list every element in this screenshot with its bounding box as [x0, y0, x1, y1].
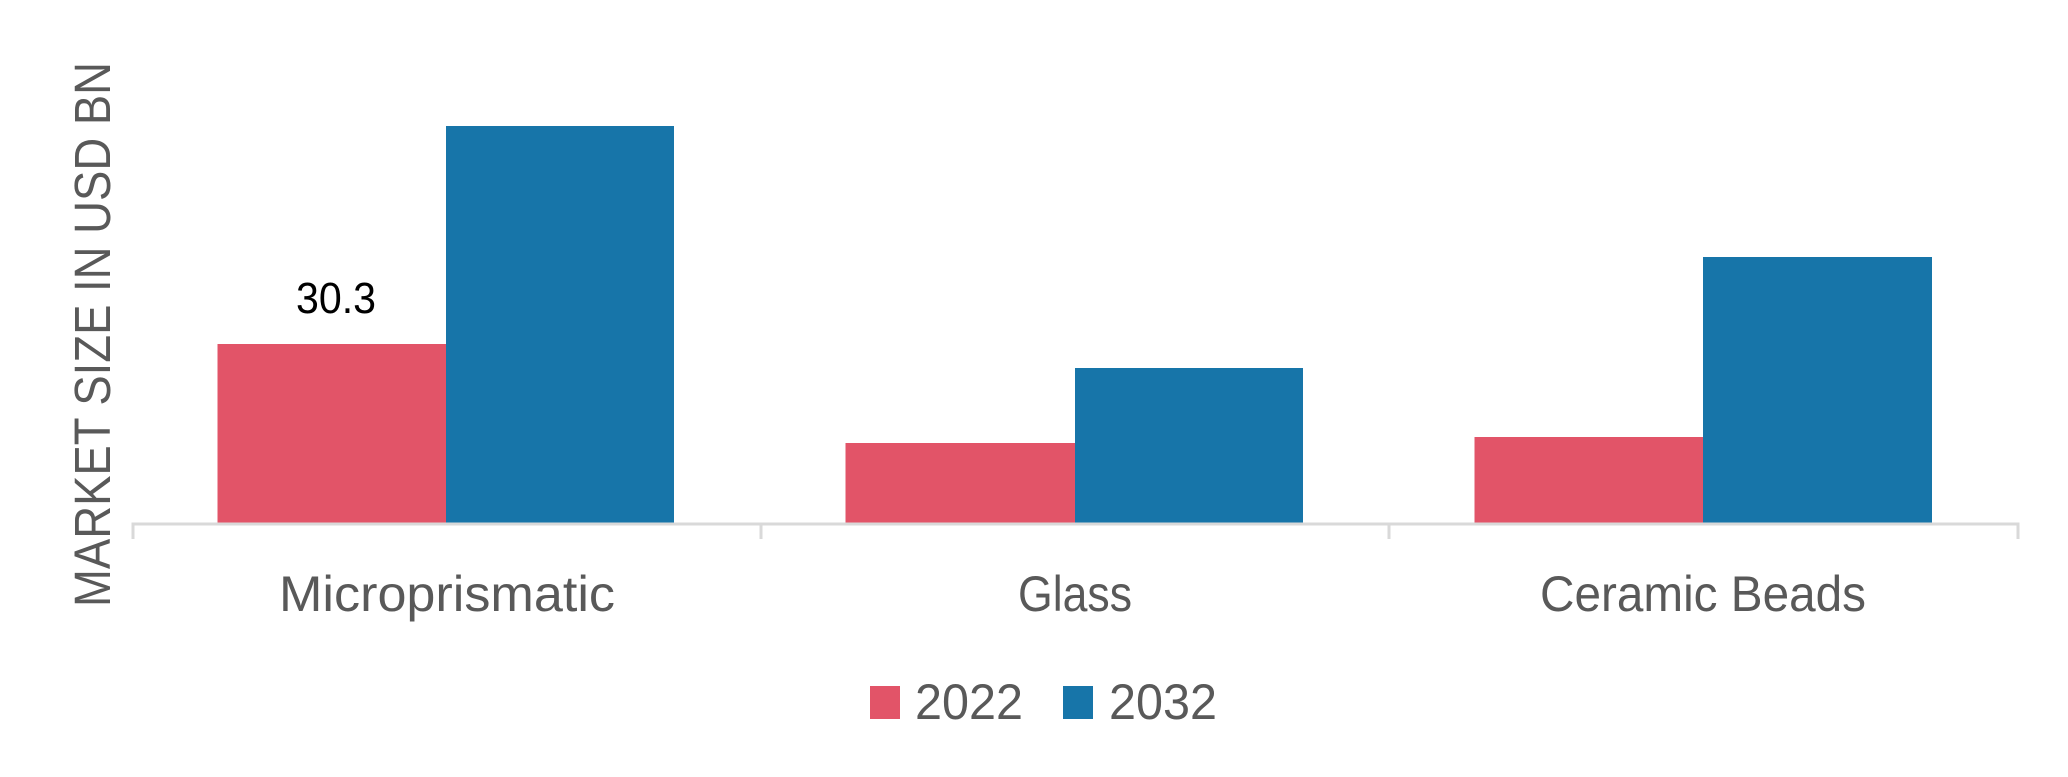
- x-axis line with ticks: [133, 524, 2018, 539]
- legend swatch: 2032: [1063, 686, 1093, 719]
- legend: [870, 674, 1217, 730]
- category label: Glass: Glass: [1018, 566, 1132, 622]
- category label: Ceramic Beads: Ceramic Beads: [1540, 566, 1866, 622]
- y-axis title: MARKET SIZE IN USD BN: [64, 62, 121, 607]
- legend label: 2022: 2022: [915, 674, 1023, 730]
- bar group: Glass: [846, 368, 1303, 524]
- bar group: Microprismatic: [218, 126, 674, 524]
- legend swatch: 2022: [870, 686, 900, 719]
- legend label: 2032: 2032: [1109, 674, 1217, 730]
- category label: Microprismatic: Microprismatic: [279, 566, 615, 622]
- data label: 30.3: 30.3: [296, 274, 376, 323]
- bar group: Ceramic Beads: [1474, 257, 1932, 524]
